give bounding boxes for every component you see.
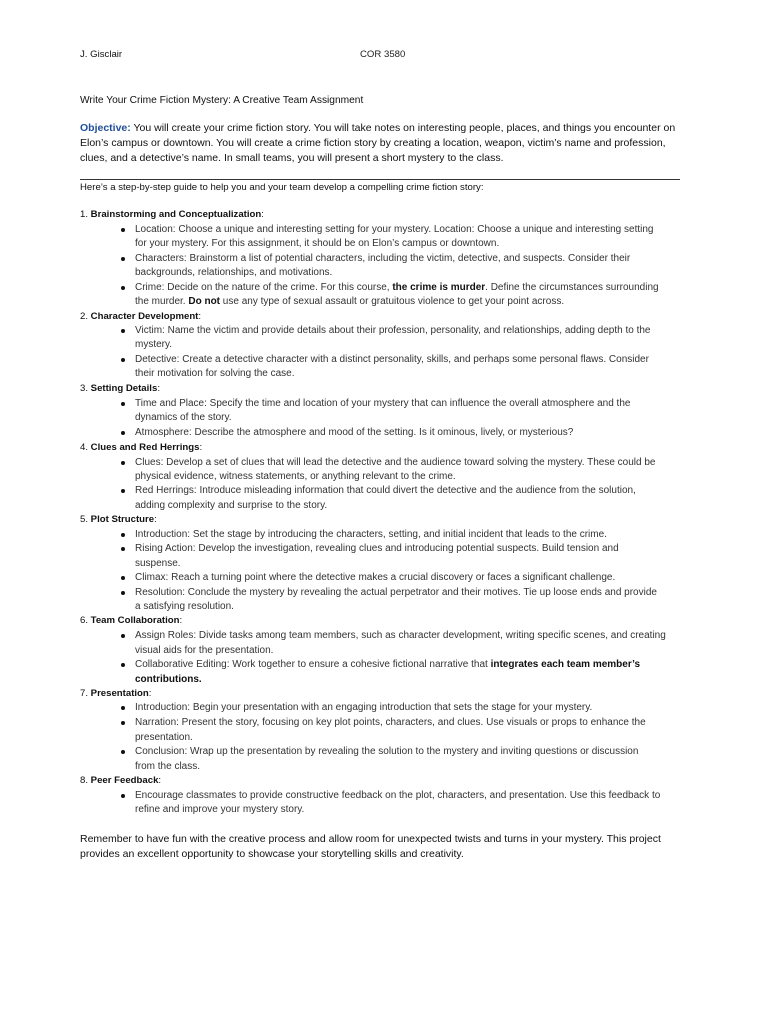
- steps list: Characters: Brainstorm a list of potential characters, including the victim, detective, and suspects. Consider their: [135, 253, 630, 264]
- steps list: mystery.: [135, 339, 172, 350]
- closing paragraph: provides an excellent opportunity to showcase your storytelling skills and creativity.: [80, 848, 464, 860]
- steps list: contributions.: [135, 674, 202, 685]
- steps list: 1. Brainstorming and Conceptualization:: [80, 209, 264, 220]
- intro line: Here’s a step-by-step guide to help you and your team develop a compelling crime fiction story:: [80, 182, 484, 193]
- steps list: Conclusion: Wrap up the presentation by revealing the solution to the mystery and inviting questions or discussion: [135, 746, 638, 757]
- steps list: Collaborative Editing: Work together to ensure a cohesive fictional narrative that integrates each team member’s: [135, 659, 640, 670]
- objective block: Elon’s campus or downtown. You will create a crime fiction story by creating a location, weapon, victim’s name and profession,: [80, 137, 666, 149]
- steps list: Introduction: Set the stage by introducing the characters, setting, and initial incident that leads to the crime.: [135, 529, 607, 540]
- steps list: their motivation for solving the case.: [135, 368, 295, 379]
- steps list: Clues: Develop a set of clues that will lead the detective and the audience toward solving the mystery. These could be: [135, 457, 655, 468]
- steps list: Rising Action: Develop the investigation, revealing clues and introducing potential suspects. Build tension and: [135, 543, 619, 554]
- steps list: backgrounds, relationships, and motivations.: [135, 267, 332, 278]
- steps list: Detective: Create a detective character with a distinct personality, skills, and perhaps some personal flaws. Consider: [135, 354, 649, 365]
- steps list: Crime: Decide on the nature of the crime. For this course, the crime is murder. Define the circumstances surrounding: [135, 282, 659, 293]
- steps list: Red Herrings: Introduce misleading information that could divert the detective and the audience from the solution,: [135, 485, 636, 496]
- steps list: 3. Setting Details:: [80, 383, 160, 394]
- steps list: Location: Choose a unique and interesting setting for your mystery. Location: Choose a unique and interesting setting: [135, 224, 653, 235]
- steps list: 4. Clues and Red Herrings:: [80, 442, 202, 453]
- steps list: for your mystery. For this assignment, it should be on Elon’s campus or downtown.: [135, 238, 499, 249]
- steps list: Time and Place: Specify the time and location of your mystery that can influence the overall atmosphere and the: [135, 398, 630, 409]
- steps list: dynamics of the story.: [135, 412, 232, 423]
- steps list: 6. Team Collaboration:: [80, 615, 182, 626]
- steps list: from the class.: [135, 761, 200, 772]
- steps list: 7. Presentation:: [80, 688, 151, 699]
- steps list: Victim: Name the victim and provide details about their profession, personality, and relationships, adding depth to the: [135, 325, 650, 336]
- steps list: Assign Roles: Divide tasks among team members, such as character development, writing specific scenes, and creating: [135, 630, 666, 641]
- header: course: COR 3580: [360, 49, 405, 60]
- steps list: Resolution: Conclude the mystery by revealing the actual perpetrator and their motives. Tie up loose ends and provide: [135, 587, 657, 598]
- steps list: Climax: Reach a turning point where the detective makes a crucial discovery or faces a significant challenge.: [135, 572, 615, 583]
- objective block: [80, 122, 675, 164]
- steps list: Introduction: Begin your presentation with an engaging introduction that sets the stage for your mystery.: [135, 702, 592, 713]
- steps list: 8. Peer Feedback:: [80, 775, 161, 786]
- steps list: Atmosphere: Describe the atmosphere and mood of the setting. Is it ominous, lively, or mysterious?: [135, 427, 573, 438]
- steps list: physical evidence, witness statements, or anything relevant to the crime.: [135, 471, 456, 482]
- steps list: 2. Character Development:: [80, 311, 201, 322]
- steps list: adding complexity and surprise to the story.: [135, 500, 327, 511]
- steps list: a satisfying resolution.: [135, 601, 234, 612]
- steps list: the murder. Do not use any type of sexual assault or gratuitous violence to get your point across.: [135, 296, 564, 307]
- steps list: 5. Plot Structure:: [80, 514, 157, 525]
- steps list: visual aids for the presentation.: [135, 645, 273, 656]
- closing paragraph: Remember to have fun with the creative process and allow room for unexpected twists and turns in your mystery. This project: [80, 833, 661, 845]
- steps list: suspense.: [135, 558, 181, 569]
- objective block: Objective: You will create your crime fiction story. You will take notes on interesting people, places, and things you encounter on: [80, 122, 675, 134]
- steps list: refine and improve your mystery story.: [135, 804, 304, 815]
- header: author: J. Gisclair: [80, 49, 122, 60]
- steps list: Narration: Present the story, focusing on key plot points, characters, and clues. Use visuals or props to enhance the: [135, 717, 646, 728]
- title: Write Your Crime Fiction Mystery: A Creative Team Assignment: [80, 95, 363, 106]
- closing paragraph: [80, 833, 661, 860]
- steps list: Encourage classmates to provide constructive feedback on the plot, characters, and presentation. Use this feedback to: [135, 790, 660, 801]
- steps list: presentation.: [135, 732, 193, 743]
- objective block: clues, and a detective’s name. In small teams, you will present a short mystery to the class.: [80, 152, 504, 164]
